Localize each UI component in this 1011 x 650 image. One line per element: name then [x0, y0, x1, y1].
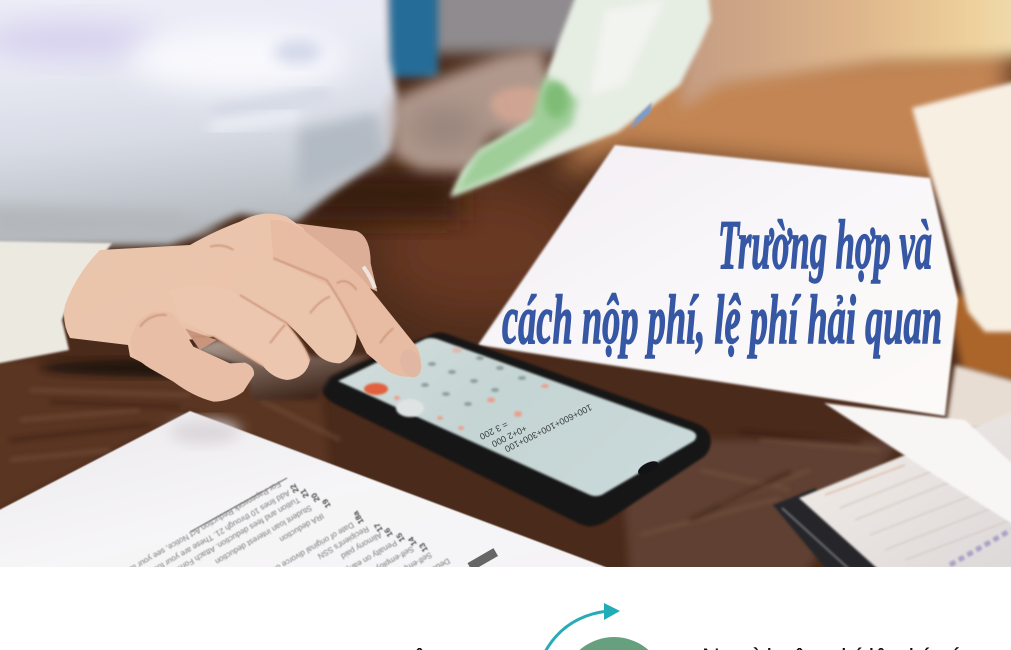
- phone screen: [338, 338, 696, 496]
- front tax form: Add lines 10 through 21. These are your total: [148, 488, 292, 576]
- front tax form: 21: [298, 487, 311, 500]
- phone notch: [638, 461, 658, 474]
- front tax form: 18a: [351, 509, 366, 526]
- notebook: [773, 403, 1011, 580]
- ring: [363, 267, 375, 288]
- front tax form: 17: [372, 521, 385, 534]
- middle finger: [272, 282, 357, 364]
- front tax form: 22: [288, 482, 301, 494]
- front tax form: Alimony paid: [339, 530, 384, 561]
- background wall: [680, 0, 1011, 110]
- fingernail: [400, 350, 422, 378]
- front tax form: [0, 410, 608, 567]
- icon: green circle: [580, 637, 648, 650]
- front tax form: 15: [394, 531, 407, 544]
- bottom section, cut off by the canvas edge: [399, 603, 962, 650]
- blurred hand holding cash: [392, 48, 558, 172]
- front tax form: Tuition and fees deduction. Attach Form 8917: [157, 495, 302, 584]
- calculator result text: +0+2 000: [490, 423, 529, 449]
- front tax form: Self-employed health insurance deduction: [282, 544, 416, 627]
- gap between fingers: [193, 340, 372, 400]
- phone: [321, 333, 711, 526]
- shirt cuff: [0, 241, 112, 365]
- calculator result text: 100+600+100+300+100: [503, 402, 594, 454]
- front tax form: Penalty on early withdrawal of savings: [277, 538, 398, 614]
- finger creases: [140, 246, 393, 367]
- front tax form: Student loan interest deduction: [213, 503, 314, 566]
- laptop and cabinet at right: [912, 78, 1011, 432]
- back of hand: [64, 214, 304, 363]
- front tax form: 20: [309, 491, 322, 504]
- front tax form: For Paperwork Reduction Act Notice, see your tax return: [105, 479, 282, 587]
- front tax form: 13: [417, 541, 430, 554]
- heading: [502, 207, 942, 359]
- front tax form: 19: [320, 497, 333, 510]
- front tax form: 16: [382, 526, 395, 538]
- front tax form: Date of original divorce or separation: [238, 520, 356, 593]
- shirt: [0, 0, 402, 245]
- finger behind ring: [297, 223, 377, 292]
- shadow under hand: [40, 359, 300, 377]
- web between fingers: [185, 328, 217, 350]
- front tax form: Self-employed SEP, SIMPLE and qualified: [299, 550, 434, 633]
- ring finger: [210, 308, 310, 380]
- pointing hand: [64, 213, 425, 402]
- front tax form: 14: [406, 535, 419, 548]
- index finger: [270, 220, 421, 377]
- front tax form: Deductible part of self-employment tax: [329, 556, 452, 632]
- lowest finger: [141, 340, 254, 402]
- icon: curved teal arrow: [545, 603, 620, 650]
- grey background: [425, 0, 595, 53]
- blue chair: [386, 0, 438, 77]
- document under heading: [478, 145, 958, 416]
- front tax form: Recipient's SSN: [316, 524, 370, 561]
- front tax form: IRA deduction: [278, 511, 326, 544]
- banknotes: [450, 0, 711, 197]
- calculator result text: = 3 200: [478, 419, 510, 442]
- calculator keypad: [364, 347, 549, 430]
